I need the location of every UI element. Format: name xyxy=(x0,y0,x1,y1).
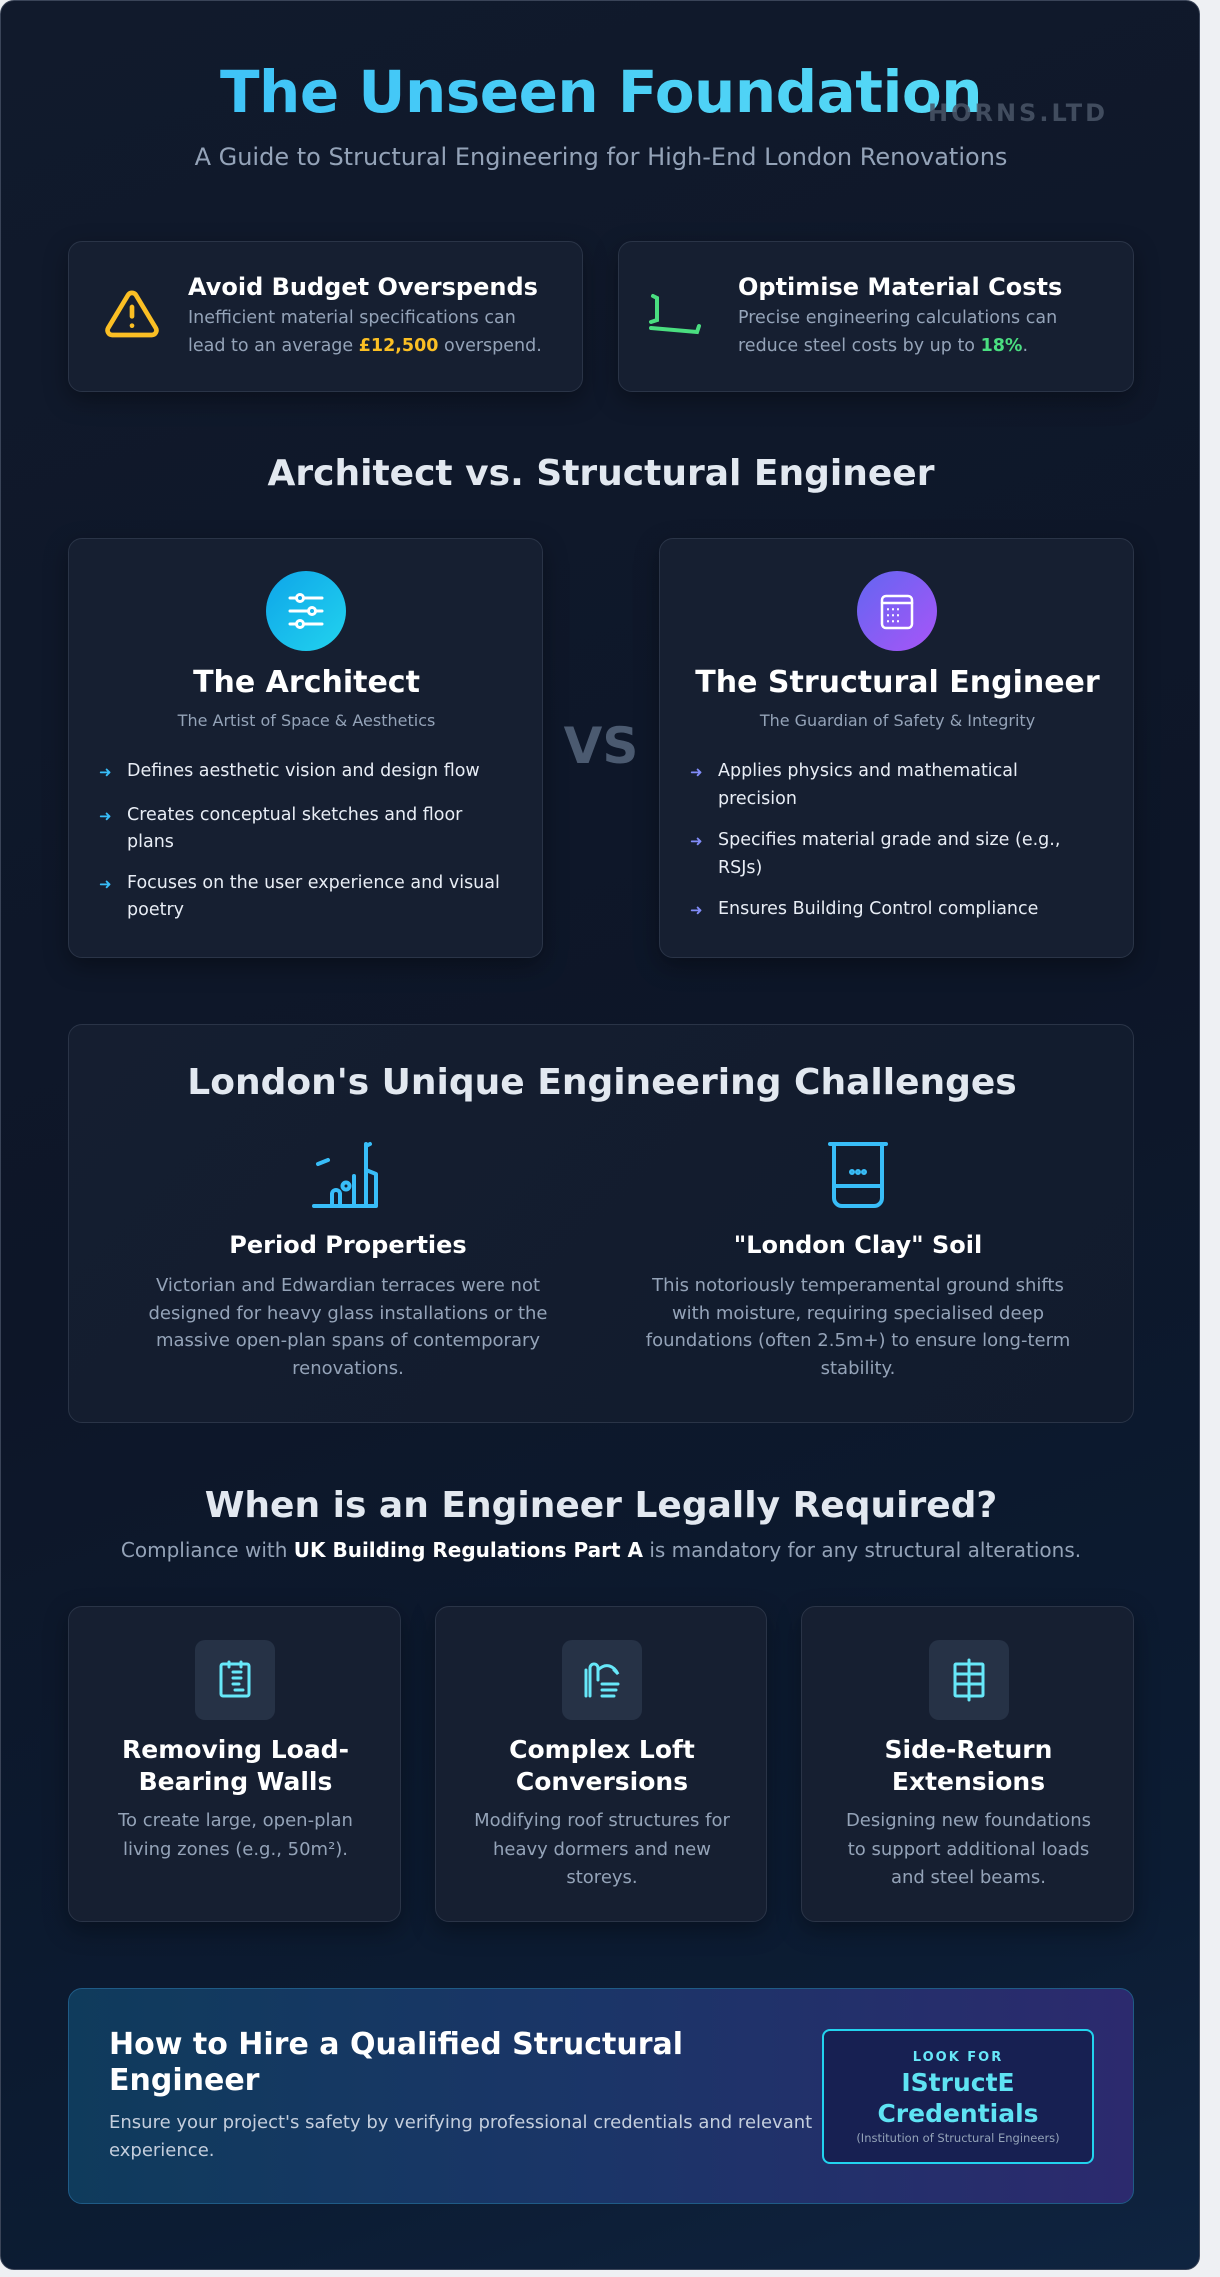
text: budget: Inefficient material specifications can lead to an average £12,500 overspend. xyxy=(188,308,542,356)
text: materials: Precise engineering calculations can reduce steel costs by up to 18%. xyxy=(738,308,1057,356)
panel: engineer xyxy=(659,538,1134,958)
tagline: The Artist of Space & Aesthetics xyxy=(178,711,435,730)
icon: warning xyxy=(105,290,159,338)
bullets: engineer: ➜ xyxy=(690,763,703,781)
name: engineer: The Structural Engineer xyxy=(695,665,1100,700)
icon: clipboard xyxy=(195,1640,275,1720)
vs label: VS xyxy=(564,717,638,775)
bullets: architect: Focuses on the user experience and visual poetry xyxy=(127,873,500,920)
stat card: budget xyxy=(68,241,583,392)
heading: challenges: London's Unique Engineering Challenges xyxy=(187,1062,1017,1103)
text: budget xyxy=(188,273,542,356)
name: architect: The Architect xyxy=(193,665,420,700)
bullets: engineer: Ensures Building Control compliance xyxy=(718,899,1038,919)
title xyxy=(509,1735,695,1796)
icon: roof xyxy=(562,1640,642,1720)
title: Side-Return xyxy=(885,1735,1052,1764)
callout: hire xyxy=(68,1988,1134,2204)
heading: comparison: Architect vs. Structural Engineer xyxy=(268,453,934,494)
challenge: period properties: Victorian and Edwardian terraces were not designed for heavy glass installations or the massive open-plan spans of contemporary renovations. xyxy=(148,1275,548,1379)
icon: calculator xyxy=(857,571,937,651)
bullets: architect: ➜ xyxy=(99,875,112,893)
bullets: architect: ➜ xyxy=(99,763,112,781)
badge: IStructE: Credentials xyxy=(877,2099,1039,2128)
heading: legal: When is an Engineer Legally Required? xyxy=(205,1485,997,1526)
bullets: engineer: ➜ xyxy=(690,832,703,850)
challenge: london clay xyxy=(646,1142,1070,1379)
panel: architect xyxy=(68,538,543,958)
bullets: architect xyxy=(99,761,500,920)
text: materials: Optimise Material Costs xyxy=(738,273,1062,301)
bullets: architect: ➜ xyxy=(99,807,112,825)
icon: soil container xyxy=(828,1142,888,1208)
title xyxy=(885,1735,1052,1796)
title xyxy=(122,1735,349,1796)
description: Designing new foundations to support additional loads and steel beams. xyxy=(846,1810,1091,1888)
bullets: engineer: Applies physics and mathematical precision xyxy=(718,761,1018,809)
badge: IStructE: (Institution of Structural Engineers) xyxy=(856,2131,1060,2145)
watermark: HORNS.LTD xyxy=(928,99,1108,127)
description: To create large, open-plan living zones (e.g., 50m²). xyxy=(118,1810,353,1860)
icon: trend xyxy=(648,294,701,334)
subheading: legal: Compliance with UK Building Regulations Part A is mandatory for any structural alterations. xyxy=(121,1538,1081,1562)
tagline: The Guardian of Safety & Integrity xyxy=(760,711,1035,730)
text: budget: Avoid Budget Overspends xyxy=(188,273,538,301)
title: The Unseen Foundation xyxy=(220,58,982,126)
title: Extensions xyxy=(892,1767,1045,1796)
icon: grid xyxy=(929,1640,1009,1720)
callout text: Ensure your project's safety by verifying professional credentials and relevant experience. xyxy=(109,2112,812,2161)
panel: challenges xyxy=(68,1024,1134,1423)
card: load-bearing walls xyxy=(68,1606,401,1922)
title: Conversions xyxy=(516,1767,688,1796)
challenge: london clay: This notoriously temperamental ground shifts with moisture, requiring specialised deep foundations (often 2.5m+) to ensure long-term stability. xyxy=(646,1275,1070,1379)
bullets: engineer: ➜ xyxy=(690,901,703,919)
badge: IStructE: IStructE xyxy=(901,2068,1015,2097)
challenge: period properties: Period Properties xyxy=(229,1231,467,1259)
bullets: engineer: Specifies material grade and size (e.g., RSJs) xyxy=(718,830,1060,878)
bullets: architect: Defines aesthetic vision and design flow xyxy=(127,761,480,781)
challenge: period properties xyxy=(148,1142,548,1379)
challenge: london clay: "London Clay" Soil xyxy=(734,1231,982,1259)
icon: building xyxy=(312,1142,378,1208)
title: Complex Loft xyxy=(509,1735,695,1764)
title: Removing Load- xyxy=(122,1735,349,1764)
title: Bearing Walls xyxy=(139,1767,332,1796)
stat card: materials xyxy=(618,241,1134,392)
callout title: How to Hire a Qualified Structural Engineer xyxy=(109,2027,683,2098)
subtitle: A Guide to Structural Engineering for High-End London Renovations xyxy=(195,143,1007,171)
badge: IStructE xyxy=(822,2029,1094,2164)
card: side-return xyxy=(801,1606,1134,1922)
bullets: engineer xyxy=(690,761,1060,919)
card: loft conversions xyxy=(435,1606,767,1922)
badge: IStructE: LOOK FOR xyxy=(913,2050,1003,2065)
text: materials xyxy=(738,273,1062,356)
title xyxy=(1,58,1201,126)
icon: sliders xyxy=(266,571,346,651)
bullets: architect: Creates conceptual sketches and floor plans xyxy=(127,805,462,852)
description: Modifying roof structures for heavy dormers and new storeys. xyxy=(474,1810,730,1888)
